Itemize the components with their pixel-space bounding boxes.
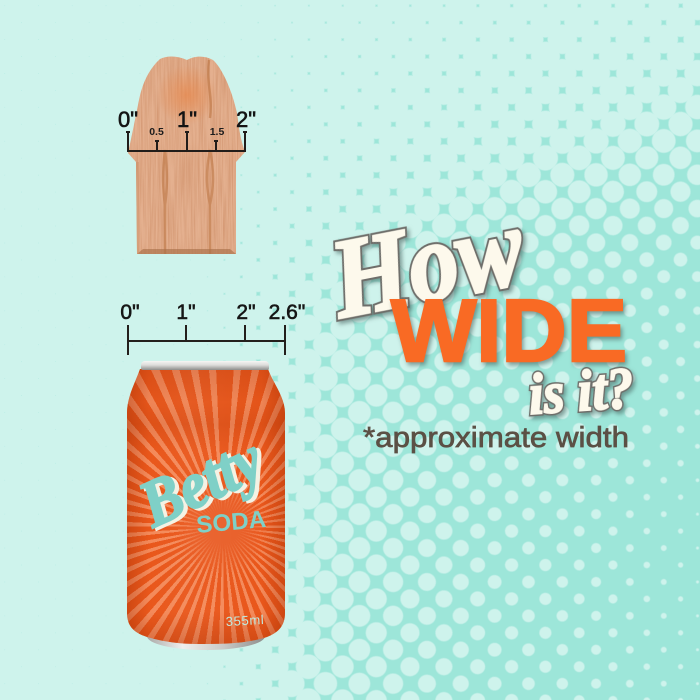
title: How WIDE is it?: is it?	[526, 355, 636, 427]
ruler: wood width: 2"	[236, 107, 256, 132]
panel: can ruler and label text: 0"	[120, 301, 140, 324]
ruler: wood width: 0.5	[149, 126, 164, 138]
ruler: wood width: 1"	[177, 107, 197, 132]
panel: wooden object with 2 inch ruler	[118, 56, 256, 254]
ruler: wood width: 0"	[118, 107, 138, 132]
panel: can ruler and label text: 1"	[176, 301, 196, 324]
title: How WIDE is it?: *approximate width	[363, 422, 629, 454]
panel: can ruler and label text: 2"	[236, 301, 256, 324]
panel: can ruler and label text: SODA	[195, 506, 267, 539]
panel: can ruler and label text: 2.6"	[269, 301, 305, 324]
ruler: wood width: 1.5	[210, 126, 224, 138]
title: How WIDE is it?: is it?	[526, 355, 636, 427]
title: How WIDE is it?: WIDE	[391, 281, 627, 380]
ruler: wood width	[118, 107, 256, 151]
title: How WIDE is it?: How	[320, 184, 534, 343]
panel: soda can	[127, 361, 285, 650]
title: How WIDE is it?: How	[320, 184, 534, 343]
panel: can ruler and label text: Betty	[128, 422, 274, 542]
panel: can ruler and label text: Betty	[132, 423, 278, 543]
panel: can ruler and label text: 355ml	[225, 612, 264, 629]
